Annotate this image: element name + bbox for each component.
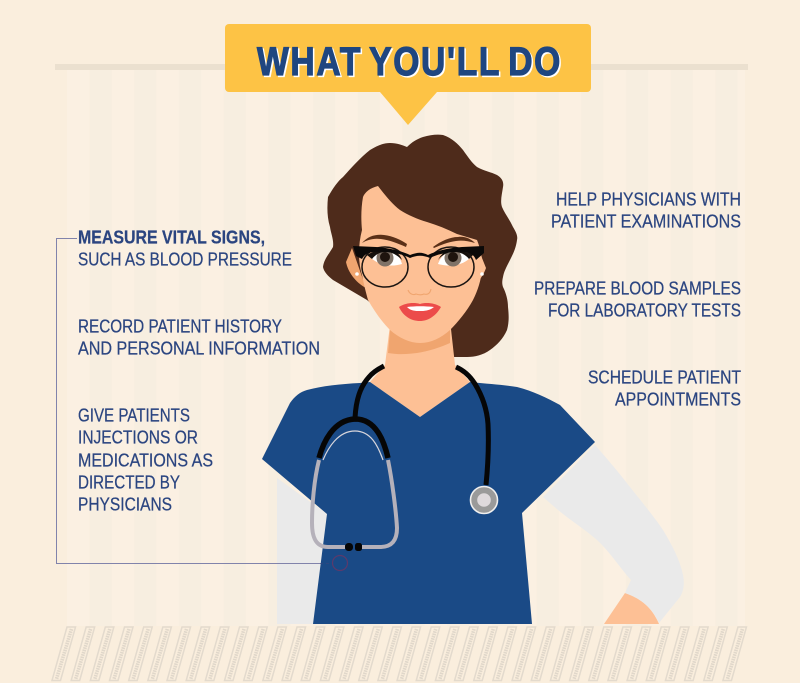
neck shadow <box>388 325 450 354</box>
neck <box>370 320 470 417</box>
stethoscope <box>312 366 498 551</box>
text: give patients injections: INJECTIONS OR <box>78 426 198 448</box>
text: prepare blood samples: FOR LABORATORY TESTS <box>548 300 741 320</box>
face <box>359 186 482 343</box>
right arm sleeve <box>543 445 684 623</box>
text: measure vital signs: MEASURE VITAL SIGNS, <box>78 226 265 248</box>
text: record patient history: RECORD PATIENT HISTORY <box>78 316 282 336</box>
text: give patients injections: GIVE PATIENTS <box>78 404 190 426</box>
text: record patient history: AND PERSONAL INFORMATION <box>78 338 320 358</box>
text: give patients injections: PHYSICIANS <box>78 494 172 514</box>
left arm sleeve <box>277 478 327 624</box>
hair back and bun <box>323 135 517 357</box>
chest piece <box>470 486 498 514</box>
text: prepare blood samples <box>534 278 741 320</box>
text: measure vital signs <box>78 226 292 270</box>
earrings <box>355 272 359 276</box>
text: give patients injections <box>78 404 213 514</box>
text: record patient history <box>78 316 320 358</box>
text: help physicians <box>551 188 741 232</box>
mouth <box>399 303 441 321</box>
right eye <box>438 249 474 266</box>
text: help physicians: PATIENT EXAMINATIONS <box>551 210 741 232</box>
ear tips <box>345 543 353 551</box>
text: give patients injections: MEDICATIONS AS <box>78 450 213 470</box>
text: schedule appointments: APPOINTMENTS <box>615 388 741 410</box>
connector line and marker <box>56 238 348 570</box>
glasses <box>353 246 484 287</box>
text: schedule appointments <box>588 366 741 410</box>
eyebrows <box>362 235 407 247</box>
title: WHAT YOU'LL DO <box>257 40 562 84</box>
text: prepare blood samples: PREPARE BLOOD SAMPLES <box>534 278 741 298</box>
scrubs <box>262 382 595 624</box>
title: WHAT YOU'LL DO <box>258 42 564 86</box>
ears <box>346 248 366 288</box>
nose <box>408 289 431 295</box>
bottom hatch band <box>52 627 746 680</box>
text: help physicians: HELP PHYSICIANS WITH <box>556 188 741 210</box>
text: give patients injections: DIRECTED BY <box>78 472 180 492</box>
hand <box>604 593 659 624</box>
nurse illustration <box>262 135 684 624</box>
title banner <box>225 24 591 125</box>
left eye <box>367 249 402 266</box>
text: schedule appointments: SCHEDULE PATIENT <box>588 366 741 388</box>
text: measure vital signs: SUCH AS BLOOD PRESSURE <box>78 248 292 270</box>
